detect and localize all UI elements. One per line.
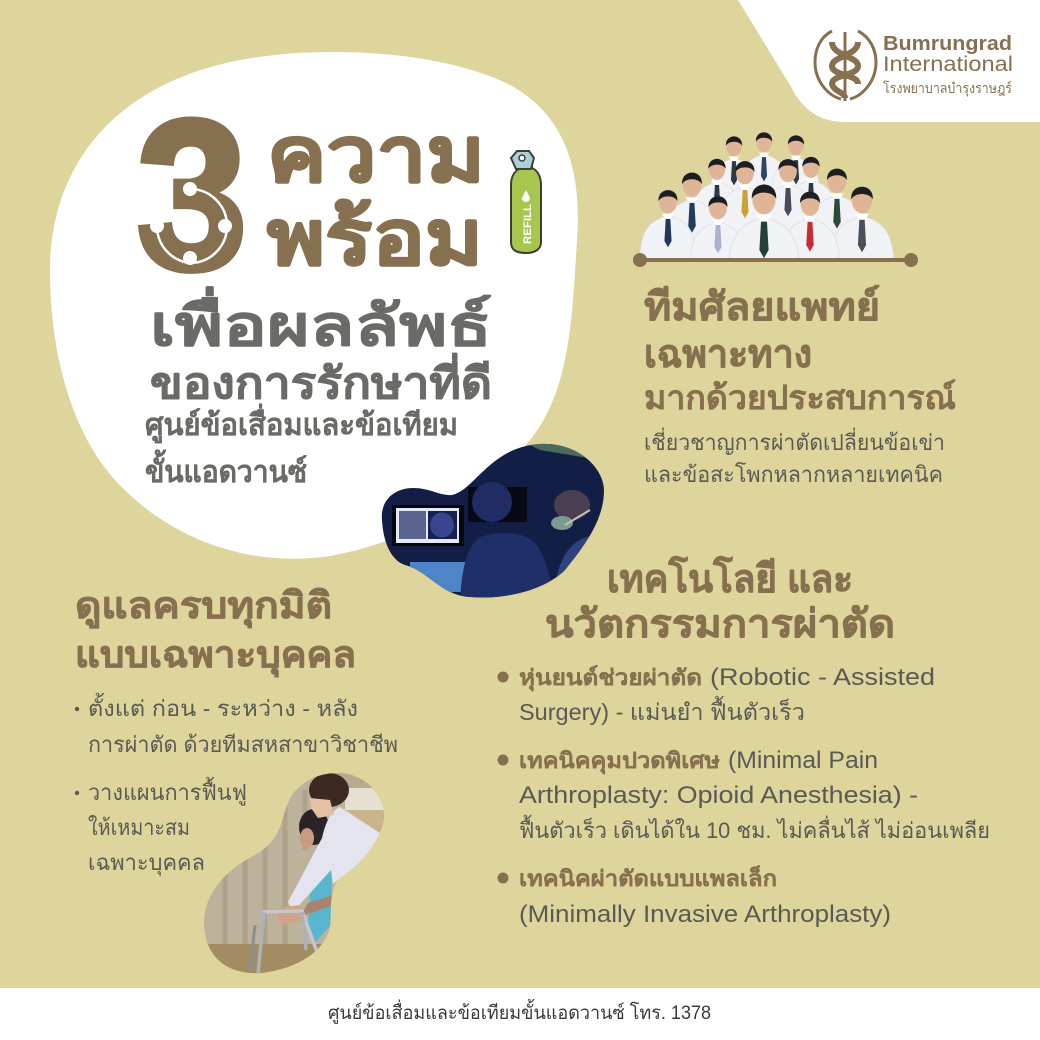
team description [644, 427, 945, 487]
footer: ศูนย์ข้อเสื่อมและข้อเทียมขั้นแอดวานซ์ โทร. 1378 [328, 999, 711, 1024]
title: ความ [267, 113, 485, 198]
team photo [633, 132, 918, 280]
care heading: แบบเฉพาะบุคคล [75, 634, 356, 678]
logo text [883, 33, 1013, 97]
subtitle: ศูนย์ข้อเสื่อมและข้อเทียม [145, 403, 458, 444]
team heading: มากด้วยประสบการณ์ [644, 379, 956, 416]
team description: เชี่ยวชาญการผ่าตัดเปลี่ยนข้อเข่า [644, 427, 945, 455]
care bullets: เฉพาะบุคคล [88, 850, 205, 876]
technology list: (Minimal Pain [728, 747, 878, 774]
technology heading: นวัตกรรมการผ่าตัด [545, 603, 895, 646]
logo text: โรงพยาบาลบำรุงราษฎร์ [883, 80, 1012, 97]
photo: surgeons [378, 440, 608, 600]
care bullets: การผ่าตัด ด้วยทีมสหสาขาวิชาชีพ [88, 732, 398, 757]
subtitle: ของการรักษาที่ดี [150, 353, 492, 408]
logo text: International [883, 53, 1013, 76]
big number 3: 3 [137, 76, 247, 313]
logo emblem [815, 31, 876, 101]
footer [0, 988, 1040, 1040]
technology list: ฟื้นตัวเร็ว เดินได้ใน 10 ชม. ไม่คลื่นไส้ ไม่อ่อนเพลีย [519, 815, 990, 843]
team heading: เฉพาะทาง [644, 333, 812, 376]
technology list: เทคนิคผ่าตัดแบบแพลเล็ก [519, 864, 777, 891]
title [267, 113, 485, 281]
team description: และข้อสะโพกหลากหลายเทคนิค [644, 462, 943, 487]
subtitle: เพื่อผลลัพธ์ [150, 286, 492, 357]
panel: personalised care [75, 585, 398, 980]
technology list: (Minimally Invasive Arthroplasty) [519, 901, 891, 928]
technology heading [545, 556, 895, 646]
technology list: Surgery) - แม่นยำ ฟื้นตัวเร็ว [519, 696, 805, 725]
subtitle [145, 286, 492, 489]
photo: nurse with patient [200, 770, 390, 980]
team heading: ทีมศัลยแพทย์ [644, 284, 880, 329]
care heading [75, 585, 356, 678]
panel: surgeons team [633, 132, 956, 487]
care heading: ดูแลครบทุกมิติ [75, 585, 332, 629]
care bullets: วางแผนการฟื้นฟู [88, 777, 247, 806]
title: พร้อม [267, 196, 483, 281]
care bullets [75, 693, 398, 876]
panel: technology [498, 556, 990, 928]
technology heading: เทคโนโลยี และ [607, 556, 853, 601]
icon: refill bottle: REFILL [522, 204, 534, 244]
care bullets: ตั้งแต่ ก่อน - ระหว่าง - หลัง [88, 693, 358, 721]
icon: refill bottle [511, 151, 541, 253]
technology list [498, 664, 990, 928]
team heading [644, 284, 956, 416]
technology list: หุ่นยนต์ช่วยผ่าตัด [519, 665, 702, 692]
subtitle: ขั้นแอดวานซ์ [145, 449, 307, 489]
technology list: (Robotic - Assisted [710, 664, 935, 691]
technology list: Arthroplasty: Opioid Anesthesia) - [519, 782, 918, 809]
logo panel [738, 0, 1040, 122]
logo text: Bumrungrad [883, 33, 1012, 55]
technology list: เทคนิคคุมปวดพิเศษ [519, 748, 721, 775]
care bullets: ให้เหมาะสม [88, 815, 190, 840]
white blob panel [50, 52, 578, 559]
